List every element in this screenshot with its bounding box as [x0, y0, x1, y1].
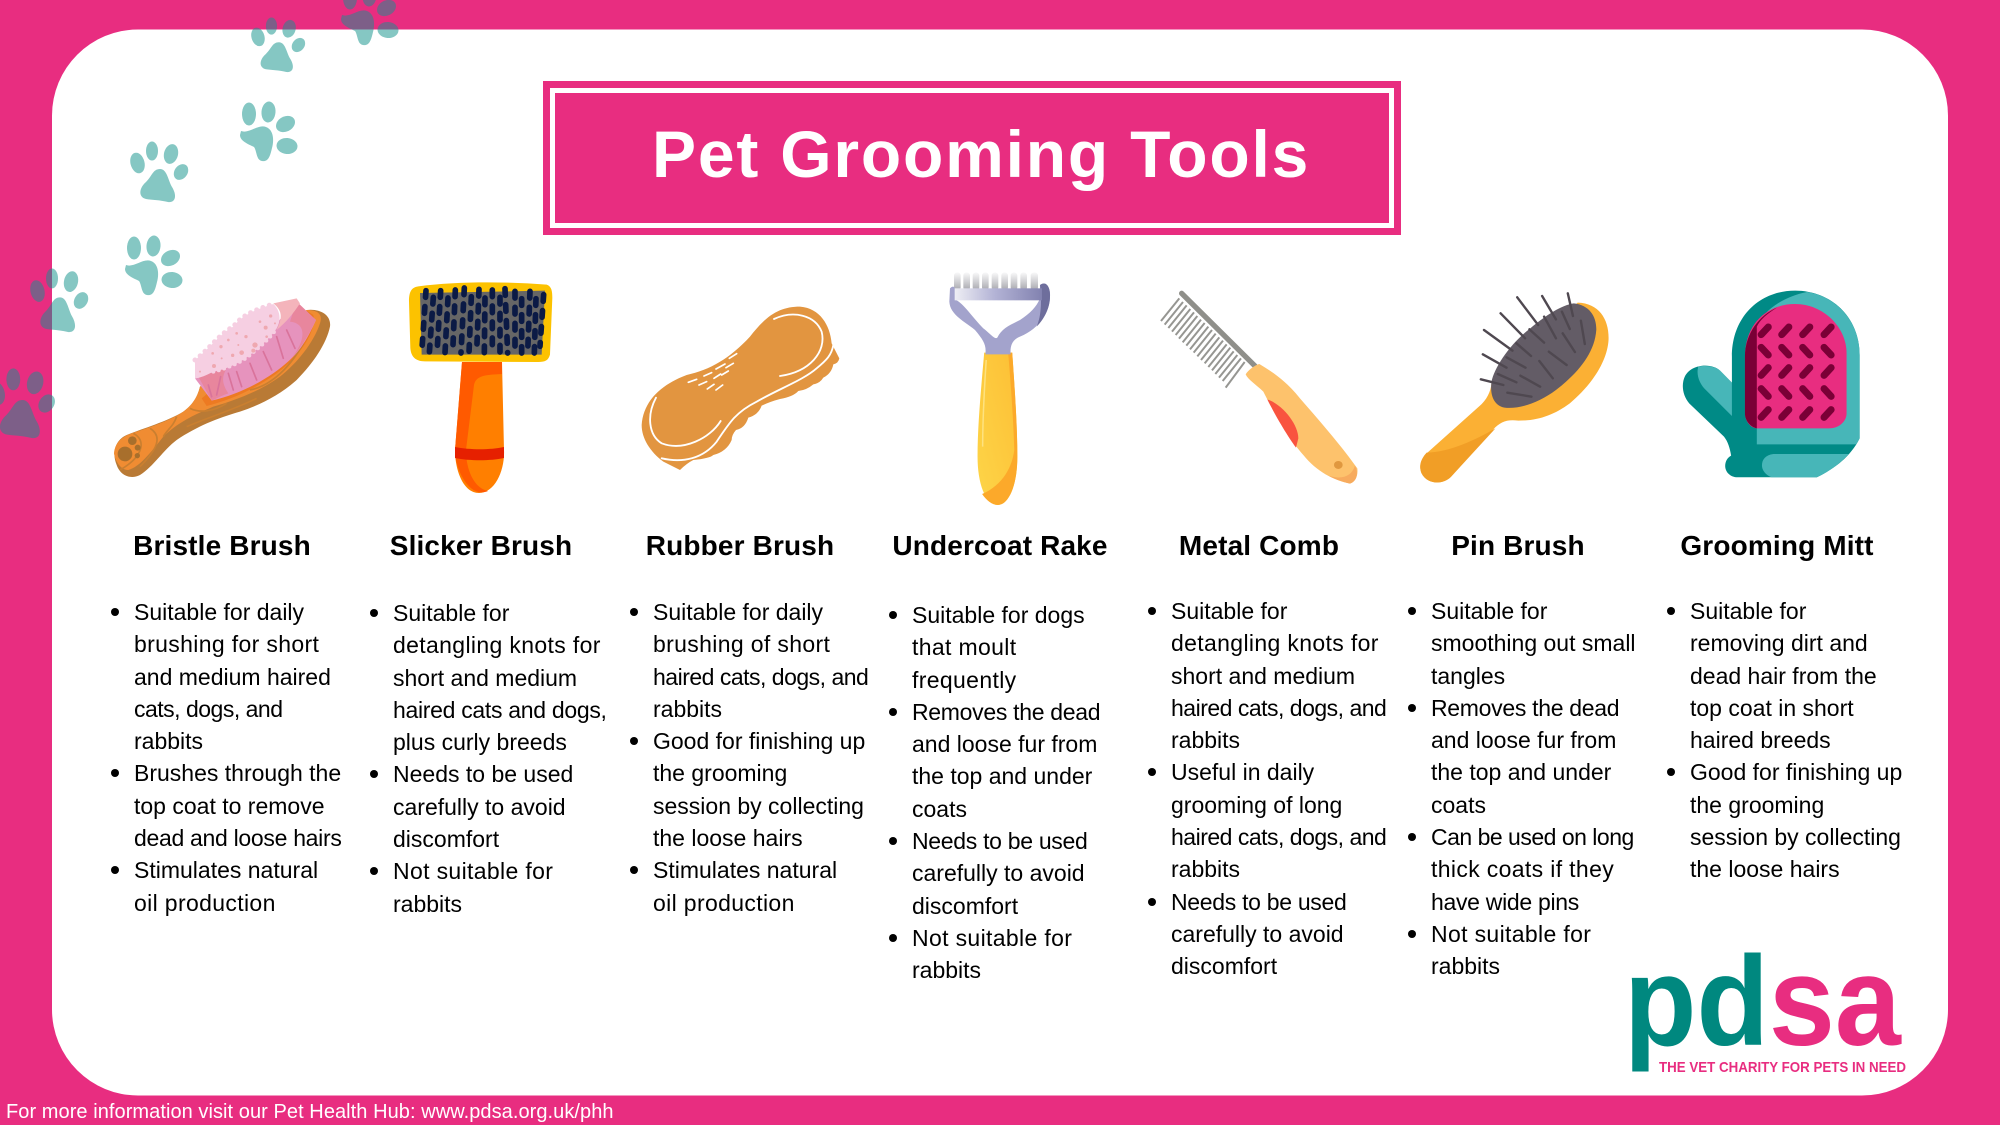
- list: Bristle Brush points: brushing for short: [134, 631, 319, 657]
- heading: Metal Comb: Metal Comb: [1179, 530, 1339, 561]
- title banner: Pet Grooming Tools: [652, 117, 1310, 191]
- list: Slicker Brush points: carefully to avoid: [393, 794, 566, 820]
- list: Undercoat Rake points: Suitable for dogs: [912, 602, 1085, 628]
- list: Rubber Brush points: the grooming: [653, 760, 787, 786]
- list: Pin Brush points: smoothing out small: [1431, 630, 1636, 656]
- heading: Undercoat Rake: Undercoat Rake: [892, 530, 1108, 561]
- list: Pin Brush points: Removes the dead: [1431, 695, 1619, 721]
- list: Metal Comb points: Useful in daily: [1171, 759, 1314, 785]
- list: Rubber Brush points: brushing of short: [653, 631, 830, 657]
- icon: bristle brush: [114, 298, 330, 477]
- list: Grooming Mitt points: top coat in short: [1690, 695, 1854, 721]
- list: Grooming Mitt points: Good for finishing up: [1690, 759, 1902, 785]
- list: Bristle Brush points: Brushes through the: [134, 760, 341, 786]
- list: Metal Comb points: haired cats, dogs, and: [1171, 695, 1386, 721]
- list: Metal Comb points: Suitable for: [1171, 598, 1287, 624]
- list: Metal Comb points: short and medium: [1171, 663, 1355, 689]
- list: Grooming Mitt points: Suitable for: [1690, 598, 1806, 624]
- list: Bristle Brush points: [111, 599, 342, 916]
- list: Bristle Brush points: Stimulates natural: [134, 857, 318, 883]
- list: Slicker Brush points: Suitable for: [393, 600, 509, 626]
- list: Grooming Mitt points: [1667, 598, 1902, 882]
- column: Undercoat Rake: [889, 530, 1108, 983]
- list: Undercoat Rake points: discomfort: [912, 893, 1018, 919]
- list: Bristle Brush points: cats, dogs, and: [134, 696, 282, 722]
- list: Bristle Brush points: rabbits: [134, 728, 203, 754]
- title banner: [543, 81, 1401, 235]
- list: Undercoat Rake points: carefully to avoid: [912, 860, 1085, 886]
- list: Pin Brush points: [1408, 598, 1636, 979]
- list: Rubber Brush points: the loose hairs: [653, 825, 803, 851]
- list: Rubber Brush points: haired cats, dogs, and: [653, 664, 868, 690]
- list: Rubber Brush points: session by collecting: [653, 793, 864, 819]
- list: Pin Brush points: Suitable for: [1431, 598, 1547, 624]
- icon: pin brush: [1420, 293, 1609, 483]
- list: Metal Comb points: carefully to avoid: [1171, 921, 1344, 947]
- footer note: For more information visit our Pet Health Hub: www.pdsa.org.uk/phh: [6, 1101, 614, 1123]
- list: Rubber Brush points: [630, 599, 868, 916]
- list: Rubber Brush points: oil production: [653, 890, 795, 916]
- list: Undercoat Rake points: that moult: [912, 634, 1016, 660]
- list: Pin Brush points: and loose fur from: [1431, 727, 1616, 753]
- list: Metal Comb points: grooming of long: [1171, 792, 1342, 818]
- logo: PDSA: pdsa: [1624, 931, 1902, 1073]
- list: Metal Comb points: discomfort: [1171, 953, 1277, 979]
- list: Metal Comb points: haired cats, dogs, and: [1171, 824, 1386, 850]
- logo: PDSA: THE VET CHARITY FOR PETS IN NEED: [1659, 1059, 1906, 1076]
- list: Slicker Brush points: haired cats and dogs,: [393, 697, 607, 723]
- list: Pin Brush points: thick coats if they: [1431, 856, 1614, 882]
- list: Undercoat Rake points: Removes the dead: [912, 699, 1100, 725]
- list: Rubber Brush points: Suitable for daily: [653, 599, 823, 625]
- list: Metal Comb points: Needs to be used: [1171, 889, 1346, 915]
- list: Bristle Brush points: and medium haired: [134, 664, 331, 690]
- heading: Grooming Mitt: Grooming Mitt: [1680, 530, 1874, 561]
- heading: Pin Brush: Pin Brush: [1451, 530, 1585, 561]
- list: Grooming Mitt points: session by collecting: [1690, 824, 1901, 850]
- column: Pin Brush: [1408, 530, 1636, 979]
- list: Undercoat Rake points: coats: [912, 796, 967, 822]
- list: Pin Brush points: coats: [1431, 792, 1486, 818]
- list: Bristle Brush points: oil production: [134, 890, 276, 916]
- icon: undercoat rake: [949, 272, 1050, 505]
- list: Rubber Brush points: rabbits: [653, 696, 722, 722]
- list: Undercoat Rake points: frequently: [912, 667, 1017, 693]
- list: Slicker Brush points: plus curly breeds: [393, 729, 567, 755]
- heading: Bristle Brush: Bristle Brush: [133, 530, 311, 561]
- list: Pin Brush points: Not suitable for: [1431, 921, 1591, 947]
- list: Pin Brush points: Can be used on long: [1431, 824, 1634, 850]
- heading: Slicker Brush: Slicker Brush: [390, 530, 572, 561]
- list: Grooming Mitt points: dead hair from the: [1690, 663, 1877, 689]
- list: Undercoat Rake points: Needs to be used: [912, 828, 1088, 854]
- list: Metal Comb points: [1148, 598, 1386, 979]
- list: Undercoat Rake points: rabbits: [912, 957, 981, 983]
- heading: Rubber Brush: Rubber Brush: [646, 530, 834, 561]
- list: Grooming Mitt points: the grooming: [1690, 792, 1824, 818]
- list: Bristle Brush points: top coat to remove: [134, 793, 324, 819]
- column: Slicker Brush: [370, 530, 607, 917]
- icon: rubber brush: [642, 307, 839, 470]
- column: Rubber Brush: [630, 530, 868, 916]
- list: Grooming Mitt points: haired breeds: [1690, 727, 1831, 753]
- list: Undercoat Rake points: the top and under: [912, 763, 1092, 789]
- list: Slicker Brush points: [370, 600, 607, 917]
- list: Undercoat Rake points: and loose fur from: [912, 731, 1097, 757]
- list: Slicker Brush points: short and medium: [393, 665, 577, 691]
- list: Pin Brush points: tangles: [1431, 663, 1505, 689]
- icon: metal comb: [1161, 293, 1357, 484]
- list: Metal Comb points: detangling knots for: [1171, 630, 1379, 656]
- list: Bristle Brush points: dead and loose hairs: [134, 825, 342, 851]
- column: Metal Comb: [1148, 530, 1386, 979]
- list: Rubber Brush points: Good for finishing up: [653, 728, 865, 754]
- list: Pin Brush points: the top and under: [1431, 759, 1611, 785]
- list: Slicker Brush points: rabbits: [393, 891, 462, 917]
- icon: grooming mitt: [1683, 291, 1860, 477]
- list: Metal Comb points: rabbits: [1171, 727, 1240, 753]
- column: Bristle Brush: [111, 530, 342, 916]
- column: Grooming Mitt: [1667, 530, 1902, 882]
- list: Slicker Brush points: detangling knots for: [393, 632, 601, 658]
- list: Undercoat Rake points: Not suitable for: [912, 925, 1072, 951]
- list: Rubber Brush points: Stimulates natural: [653, 857, 837, 883]
- list: Undercoat Rake points: [889, 602, 1100, 983]
- list: Pin Brush points: have wide pins: [1431, 889, 1579, 915]
- list: Slicker Brush points: Not suitable for: [393, 858, 553, 884]
- list: Grooming Mitt points: removing dirt and: [1690, 630, 1868, 656]
- list: Slicker Brush points: Needs to be used: [393, 761, 573, 787]
- list: Pin Brush points: rabbits: [1431, 953, 1500, 979]
- list: Bristle Brush points: Suitable for daily: [134, 599, 304, 625]
- list: Metal Comb points: rabbits: [1171, 856, 1240, 882]
- list: Slicker Brush points: discomfort: [393, 826, 499, 852]
- icon: slicker brush: [409, 282, 552, 493]
- list: Grooming Mitt points: the loose hairs: [1690, 856, 1840, 882]
